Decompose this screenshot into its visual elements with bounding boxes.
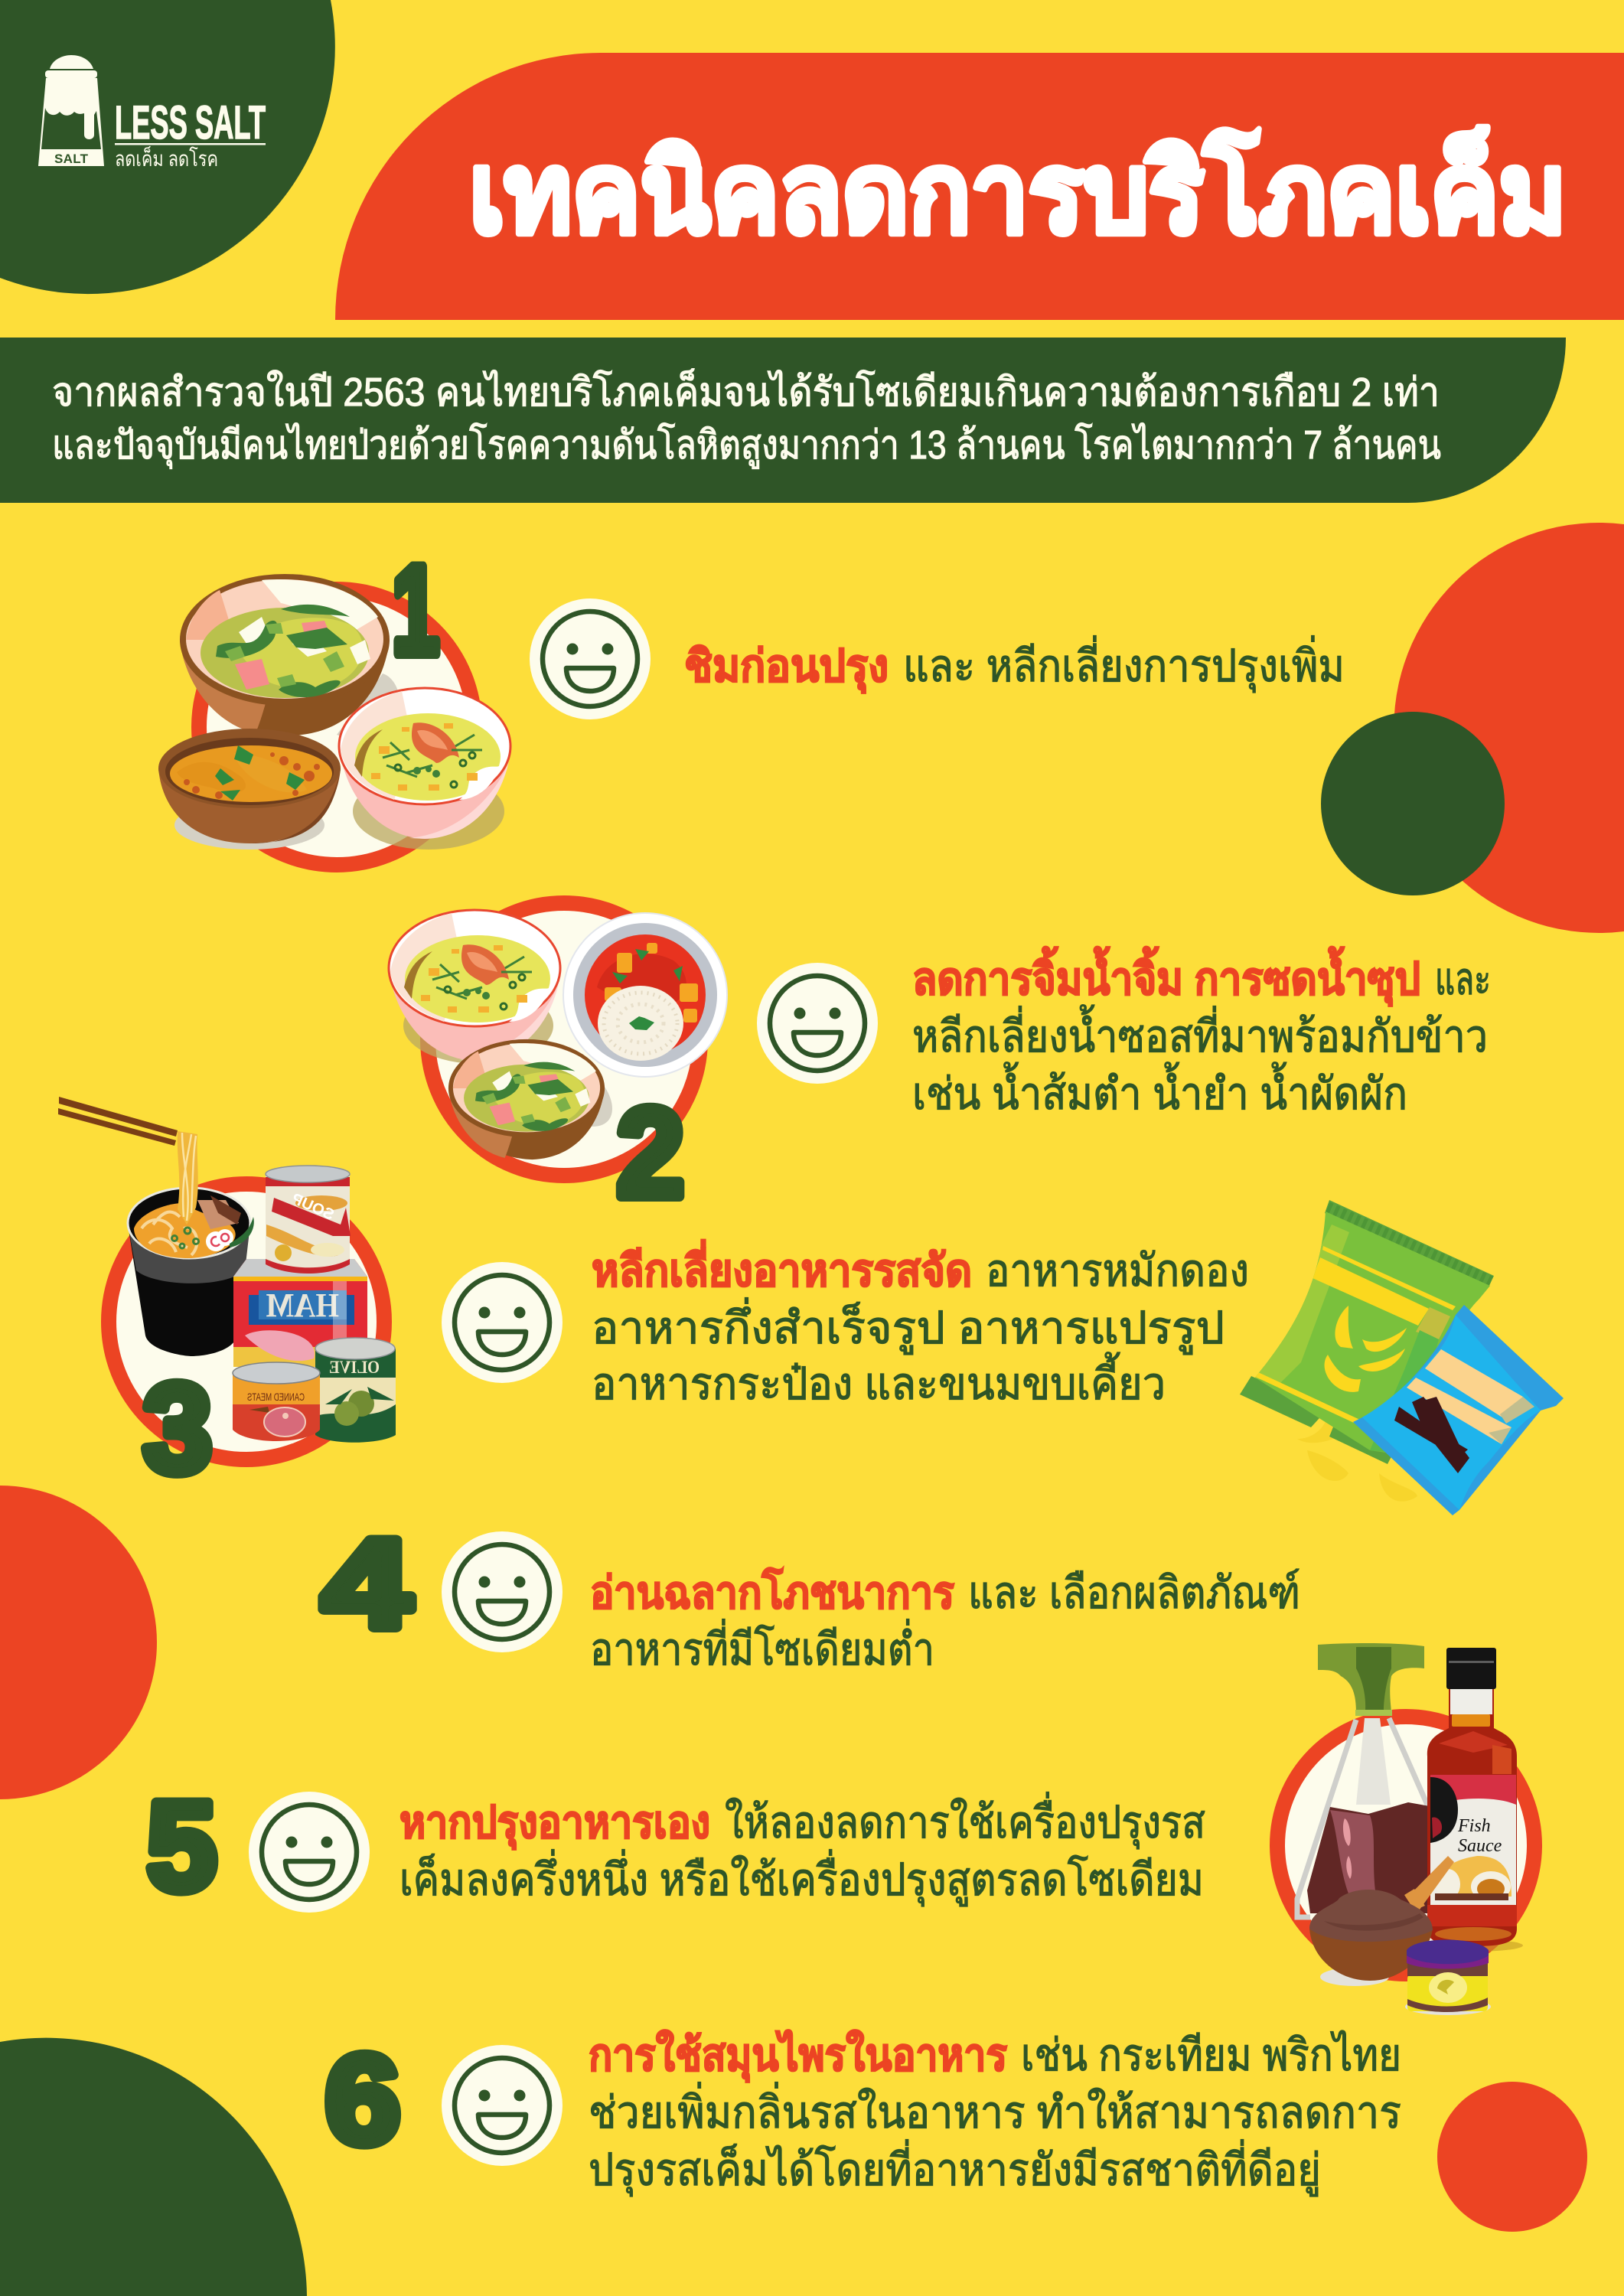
text: step 1 <box>684 635 1345 694</box>
chopsticks <box>58 1097 178 1146</box>
smile icon 1 <box>530 598 651 719</box>
smile icon 5 <box>249 1792 370 1913</box>
text: step 6: ช่วยเพิ่มกลิ่นรสในอาหาร ทำให้สามารถลดการ <box>589 2082 1401 2138</box>
icon: salt shaker: SALT <box>54 152 89 166</box>
text: step 1: ชิมก่อนปรุง <box>684 641 889 694</box>
text: step 2: เช่น น้ำส้มตำ น้ำยำ น้ำผัดผัก <box>912 1062 1407 1119</box>
small jar <box>1405 1939 1491 2015</box>
decorative circle: bottom-left green <box>0 2038 307 2296</box>
spilled chips <box>1297 1412 1417 1502</box>
text: step 2 <box>912 947 1491 1119</box>
text: step 6: การใช้สมุนไพรในอาหาร <box>589 2029 1007 2083</box>
logo: less salt <box>38 55 266 171</box>
intro text: จากผลสำรวจในปี 2563 คนไทยบริโภคเค็มจนได้รับโซเดียมเกินความต้องการเกือบ 2 เท่า <box>52 369 1440 415</box>
text: step 5: เค็มลงครึ่งหนึ่ง หรือใช้เครื่องปรุงสูตรลดโซเดียม <box>399 1849 1204 1907</box>
bag: jerky <box>1353 1305 1564 1515</box>
icon: salt shaker <box>38 55 104 166</box>
text: step 1: และ หลีกเลี่ยงการปรุงเพิ่ม <box>903 635 1345 693</box>
text: step 3: หลีกเลี่ยงอาหารรสจัด <box>592 1239 972 1296</box>
can: soup: SOUP <box>289 1190 337 1224</box>
intro text <box>52 369 1441 469</box>
fish sauce bottle: Sauce <box>1458 1836 1502 1856</box>
smile icon 2 <box>757 963 878 1084</box>
fish sauce bottle <box>1423 1648 1523 1952</box>
paste bowl <box>1309 1856 1454 1986</box>
illustration: dishes on plate (step 2) <box>389 903 727 1176</box>
can: canned meat: CANNED MEATS <box>247 1391 305 1403</box>
logo tagline: ลดเค็ม ลดโรค <box>115 145 218 171</box>
text: step 2: หลีกเลี่ยงน้ำซอสที่มาพร้อมกับข้าว <box>912 1005 1488 1062</box>
logo wordmark: LESS SALT <box>115 96 266 148</box>
text: step 3 <box>592 1239 1249 1409</box>
noodle cup <box>128 1131 254 1356</box>
number 1: 1 <box>392 540 439 680</box>
text: step 5: ให้ลองลดการใช้เครื่องปรุงรส <box>725 1792 1205 1850</box>
bag: chips <box>1240 1200 1494 1464</box>
decorative circle: left red <box>0 1486 157 1799</box>
text: step 4 <box>590 1566 1300 1675</box>
decorative circle: right red <box>1394 523 1624 933</box>
smile icon 4 <box>442 1531 563 1652</box>
text: step 4: อาหารที่มีโซเดียมต่ำ <box>590 1619 934 1675</box>
number 3: 3 <box>143 1358 212 1499</box>
text: step 4: และ เลือกผลิตภัณฑ์ <box>968 1568 1300 1618</box>
illustration: soups on plate (step 1) <box>158 574 510 865</box>
number 2: 2 <box>617 1082 684 1223</box>
illustration: snack bags <box>1240 1200 1564 1515</box>
can: canned meat <box>233 1362 320 1441</box>
soy sauce bottle <box>1297 1643 1430 1917</box>
number 5: 5 <box>147 1776 217 1916</box>
fish sauce bottle: Fish <box>1457 1816 1491 1836</box>
can: olive <box>315 1338 396 1443</box>
can: soup <box>266 1166 351 1274</box>
decorative circle: right green <box>1321 712 1505 895</box>
text: step 5: หากปรุงอาหารเอง <box>399 1798 710 1851</box>
intro band <box>0 338 1566 503</box>
text: step 2: ลดการจิ้มน้ำจิ้ม การซดน้ำซุป <box>912 947 1420 1007</box>
decorative circle: bottom-right red <box>1437 2082 1587 2232</box>
number 6: 6 <box>325 2029 400 2170</box>
text: step 6 <box>589 2029 1401 2197</box>
smile icon 6 <box>442 2045 563 2166</box>
smile icon 3 <box>442 1262 563 1383</box>
illustration: instant noodles and canned food (step 3) <box>58 1097 396 1459</box>
number 4: 4 <box>322 1513 411 1654</box>
text: step 4: อ่านฉลากโภชนาการ <box>590 1566 954 1618</box>
decorative circle: top-left green <box>0 0 335 294</box>
can: ham <box>233 1259 367 1367</box>
text: step 2: และ <box>1435 954 1491 1004</box>
text: step 3: อาหารกระป๋อง และขนมขบเคี้ยว <box>592 1352 1166 1409</box>
text: step 5 <box>399 1792 1205 1907</box>
text: step 6: เช่น กระเทียม พริกไทย <box>1021 2030 1401 2080</box>
can: olive: OLIVE <box>329 1358 380 1377</box>
text: step 6: ปรุงรสเค็มได้โดยที่อาหารยังมีรสชาติที่ดีอยู่ <box>589 2139 1321 2197</box>
text: step 3: อาหารหมักดอง <box>986 1246 1249 1296</box>
can: ham: HAM <box>266 1287 339 1324</box>
illustration: sauces and condiments <box>1277 1643 1534 2015</box>
header banner <box>335 53 1624 320</box>
text: step 3: อาหารกึ่งสำเร็จรูป อาหารแปรรูป <box>592 1297 1225 1355</box>
